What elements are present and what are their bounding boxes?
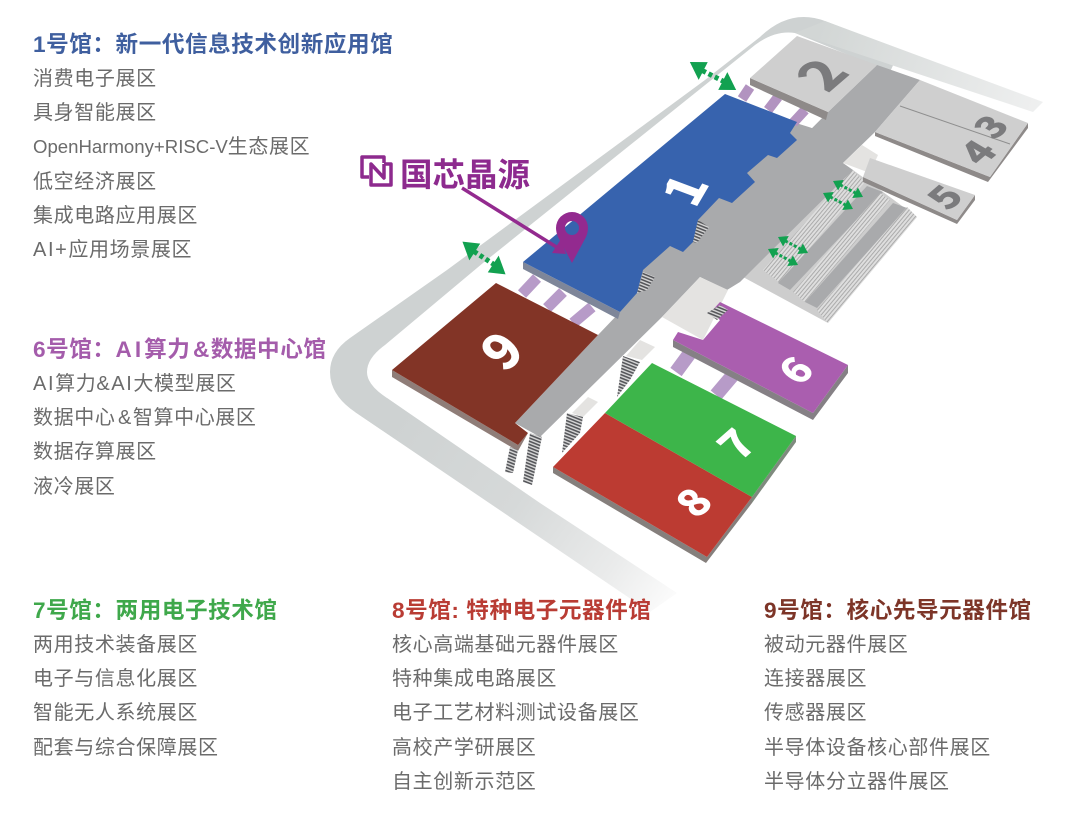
list: hall 7 zones: 两用技术装备展区: [33, 634, 198, 656]
list: hall 9 zones: 连接器展区: [764, 668, 867, 690]
logo name: 国芯晶源: [400, 157, 530, 193]
arrow: left entrance: [456, 235, 512, 281]
panel: hall 9: [764, 598, 1032, 793]
list: hall 8 zones: [392, 634, 639, 793]
heading: hall 1: 1号馆：新一代信息技术创新应用馆: [33, 32, 393, 57]
list: hall 9 zones: [764, 634, 991, 793]
panel: hall 7: [33, 598, 278, 759]
hall 9: 9: [462, 315, 538, 383]
halls 3 and 4: [875, 80, 1028, 182]
hall 9: [392, 283, 598, 451]
stairs and landings by halls 7 and 8: [562, 340, 655, 453]
bridges: hall 6 to hall 7: [676, 353, 733, 395]
list: hall 9 zones: 半导体分立器件展区: [764, 771, 950, 793]
hall 6: [662, 277, 848, 420]
list: hall 1 zones: [33, 68, 310, 261]
hall 7: 7: [701, 417, 769, 469]
hall 5: [843, 145, 975, 224]
list: hall 7 zones: [33, 634, 219, 759]
white gap between hall 1 and hall 2: [742, 85, 828, 128]
list: hall 7 zones: 智能无人系统展区: [33, 702, 198, 724]
hall 7: [605, 363, 796, 503]
icon: company logo: [362, 157, 391, 185]
list: hall 8 zones: 特种集成电路展区: [392, 668, 557, 690]
list: hall 1 zones: AI+应用场景展区: [33, 239, 192, 261]
list: hall 8 zones: 电子工艺材料测试设备展区: [392, 702, 639, 724]
heading: hall 9: 9号馆：核心先导元器件馆: [764, 598, 1032, 623]
list: hall 1 zones: 低空经济展区: [33, 171, 157, 193]
perimeter road: [330, 17, 1043, 612]
hall 5: 5: [912, 175, 974, 217]
list: hall 6 zones: AI算力&AI大模型展区: [33, 372, 237, 394]
list: hall 1 zones: 消费电子展区: [33, 68, 157, 90]
panel: hall 8: [392, 598, 651, 793]
right side stair area: [743, 170, 917, 323]
hall 6: 6: [764, 345, 824, 393]
arrows: stair crossings: [765, 176, 866, 270]
arrow: logo pointer: [462, 188, 566, 254]
panel: hall 6: [33, 337, 326, 498]
hall 8: [553, 413, 752, 563]
list: hall 1 zones: 集成电路应用展区: [33, 205, 198, 227]
list: hall 7 zones: 电子与信息化展区: [33, 668, 198, 690]
stairs below hall 9: [505, 433, 542, 485]
list: hall 9 zones: 半导体设备核心部件展区: [764, 737, 991, 759]
list: hall 8 zones: 核心高端基础元器件展区: [392, 634, 619, 656]
icon: location pin: [556, 212, 588, 263]
list: hall 6 zones: 液冷展区: [33, 476, 115, 498]
bridges: hall 1 to hall 9: [522, 278, 592, 323]
hall 1: [523, 94, 797, 319]
list: hall 8 zones: 自主创新示范区: [392, 771, 536, 793]
hall 2: 2: [774, 46, 864, 100]
panel: hall 1: [33, 32, 393, 261]
list: hall 6 zones: 数据中心&智算中心展区: [33, 407, 257, 429]
stairs by hall 1: [637, 220, 709, 293]
hall 1: 1: [642, 164, 724, 214]
arrow: top entrance: [684, 55, 742, 97]
hall 8: 8: [660, 476, 724, 526]
list: hall 1 zones: OpenHarmony+RISC-V生态展区: [33, 136, 310, 158]
list: hall 1 zones: 具身智能展区: [33, 102, 157, 124]
list: hall 7 zones: 配套与综合保障展区: [33, 737, 219, 759]
list: hall 9 zones: 被动元器件展区: [764, 634, 908, 656]
list: hall 6 zones: [33, 372, 257, 498]
halls 3 and 4: 4: [944, 130, 1008, 172]
central concourse: [515, 65, 920, 437]
heading: hall 7: 7号馆：两用电子技术馆: [33, 598, 278, 623]
list: hall 9 zones: 传感器展区: [764, 702, 867, 724]
list: hall 8 zones: 高校产学研展区: [392, 737, 536, 759]
list: hall 6 zones: 数据存算展区: [33, 441, 157, 463]
stairs by hall 6: [707, 305, 728, 320]
hall 2: [750, 36, 877, 120]
heading: hall 8: 8号馆: 特种电子元器件馆: [392, 598, 651, 623]
halls 3 and 4: 3: [960, 106, 1020, 146]
bridges: hall 1 to hall 2: [742, 87, 805, 123]
heading: hall 6: 6号馆：AI算力&数据中心馆: [33, 337, 326, 362]
